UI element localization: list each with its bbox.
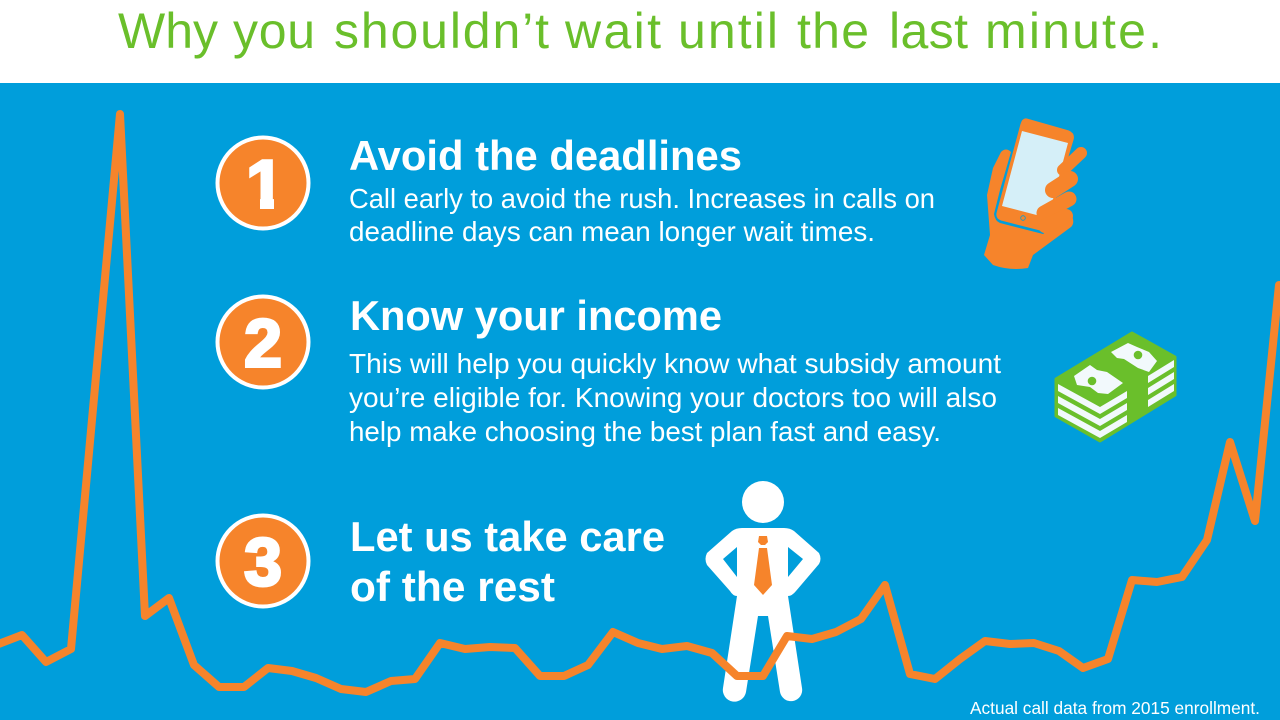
- text block: let us take care of the rest: [350, 513, 665, 610]
- text block: let us take care of the rest: of the rest: [350, 563, 555, 610]
- title: shouldn’t: [334, 3, 549, 59]
- title: until: [678, 3, 778, 59]
- title: minute.: [985, 3, 1162, 59]
- number badge 2: [218, 296, 308, 388]
- title: Why: [118, 3, 218, 59]
- text block: know your income: Know your income: [350, 292, 722, 339]
- text block: know your income: you’re eligible for. Knowing your doctors too will also: [349, 382, 997, 413]
- number badge 3: [218, 516, 308, 606]
- text block: know your income: [349, 292, 1001, 447]
- text block: know your income: help make choosing the best plan fast and easy.: [349, 416, 941, 447]
- number badge 2: 2: [244, 306, 282, 382]
- title: [118, 3, 1162, 59]
- icon: necktie: [754, 536, 772, 595]
- title: you: [233, 3, 315, 59]
- bill on top, left: [1074, 365, 1123, 394]
- icon: stack of money: [1056, 333, 1175, 441]
- title: last: [889, 3, 968, 59]
- text block: avoid the deadlines: deadline days can mean longer wait times.: [349, 216, 875, 247]
- text block: let us take care of the rest: Let us take care: [350, 513, 665, 560]
- text block: know your income: This will help you quickly know what subsidy amount: [349, 348, 1001, 379]
- number badge 3: 3: [244, 524, 282, 600]
- text block: avoid the deadlines: Avoid the deadlines: [349, 132, 742, 179]
- figure: standing man: [706, 481, 820, 702]
- icon: hand holding phone: [984, 118, 1081, 269]
- title: wait: [564, 3, 661, 59]
- number badge 1: 1: [246, 146, 284, 222]
- number badge 1: [218, 138, 308, 228]
- text block: avoid the deadlines: Call early to avoid the rush. Increases in calls on: [349, 183, 935, 214]
- bill on top, right: [1111, 343, 1157, 372]
- footnote: Actual call data from 2015 enrollment.: [970, 698, 1260, 718]
- text block: avoid the deadlines: [349, 132, 935, 247]
- title: the: [797, 3, 869, 59]
